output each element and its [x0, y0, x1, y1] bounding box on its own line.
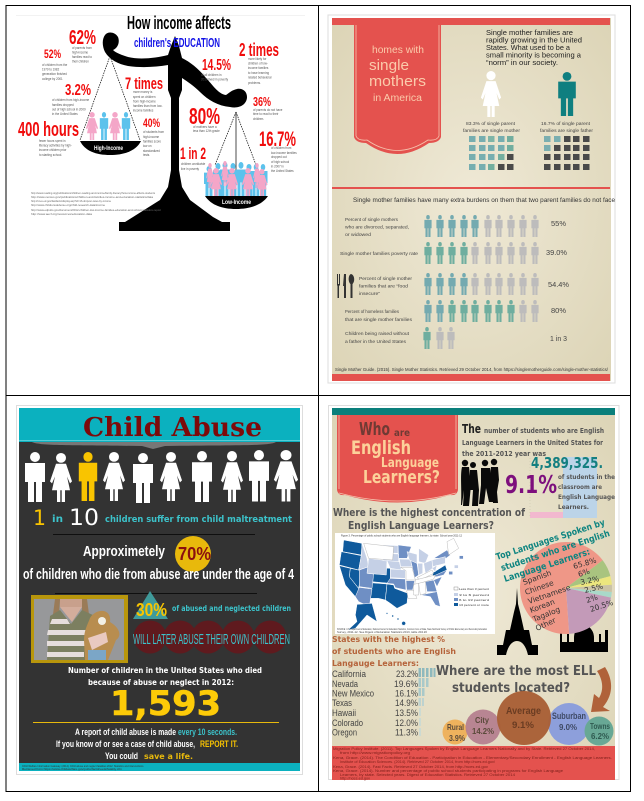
small statistic notes: the United States: [271, 169, 294, 173]
row labels: Percent of homeless families: [345, 309, 399, 315]
right pan: low-income: [204, 112, 268, 209]
small statistic notes: live in poverty: [181, 167, 199, 171]
small statistic notes: problems.: [248, 81, 261, 85]
footer references: Kena, Grace. (2014). Fast Facts. Retrieved 27 October 2014, from http://nces.ed.gov: [333, 765, 488, 769]
footer references: from http://www.migrationpolicy.org: [340, 751, 410, 755]
choropleth map of the United States: Less than 3 percent: [459, 587, 489, 591]
small statistic notes: low-income families: [271, 151, 297, 155]
small statistic notes: 1979 to 1982: [42, 67, 59, 72]
intro text: “norm” in our society.: [486, 58, 558, 67]
statistic: 1 in 10: 1: [33, 506, 46, 530]
heading: locations: Where are the most ELL: [436, 663, 596, 679]
captions: families are single mother: [463, 128, 521, 133]
row labels: Percent of single mother: [359, 276, 412, 282]
statistic: 1 in 10: children suffer from child maltreatment: [105, 515, 293, 525]
intro text: rapidly growing in the United: [486, 36, 582, 44]
ribbon heading: [337, 415, 458, 502]
captions: [463, 121, 594, 133]
small statistic notes: of high school: [271, 160, 289, 164]
bubble chart: locations: Suburban: [552, 711, 586, 722]
source list: http://www.aecf.org/resources/education-data: [31, 213, 93, 216]
small statistic notes: out of high school in 2009: [52, 107, 86, 112]
small statistic notes: high-income: [143, 135, 159, 139]
chart bars behind statistic: [530, 457, 597, 518]
row labels: a father in the United States: [345, 339, 407, 345]
row values: [546, 221, 569, 343]
pie labels: Vietnamese: [527, 583, 572, 606]
row labels: that are single mother families: [345, 317, 413, 323]
pie labels: 3.2%: [580, 574, 600, 587]
bubble chart: locations: [442, 691, 614, 746]
intro text: the 2011-2012 year was: [462, 450, 546, 458]
row labels: who are divorced, separated,: [345, 224, 409, 230]
state list: Oregon: [332, 728, 357, 738]
intro text: Single mother families are: [486, 28, 573, 37]
call to action: REPORT IT.: [200, 739, 238, 749]
call to action: [56, 727, 238, 761]
call to action: If you know of or see a case of child abuse,: [56, 739, 195, 749]
state list: Nevada: [332, 679, 358, 689]
small statistic notes: more money is: [133, 90, 153, 94]
state list: Hawaii: [332, 708, 356, 718]
row labels: or widowed: [345, 232, 371, 238]
icon: Eiffel Tower: [497, 588, 538, 655]
bubble chart: locations: 9.1%: [512, 720, 535, 731]
bubble chart: locations: 14.2%: [472, 726, 494, 736]
footer references: Learners, by state. Selected years. Digest of Education Statistics. Retrieved 27 October 2014: [340, 773, 515, 777]
small statistic notes: in 2007 in: [271, 164, 284, 169]
heading: top languages: students who are English: [500, 529, 611, 574]
call to action: save a life.: [144, 752, 193, 761]
ribbon heading: Learners?: [363, 467, 440, 488]
state list: 14.9%: [395, 698, 418, 708]
pie labels: Korean: [528, 597, 556, 615]
pie labels: Chinese: [524, 578, 555, 597]
mini pictograms: [418, 668, 436, 736]
source list: http://www.census.gov/publications/children-and-families-income-and-education-statistics/data: [31, 196, 154, 199]
small statistic notes: spent on children: [133, 95, 156, 99]
statistic: 70%: Approximetely: [83, 543, 166, 560]
choropleth map of the United States: 6 to 13 percent: [459, 598, 489, 602]
small statistic notes: families dropped: [52, 103, 74, 107]
row values: 39.0%: [546, 250, 567, 257]
bubble chart: locations: 3.9%: [449, 733, 465, 743]
small statistic notes: related behavioral: [248, 75, 272, 80]
panel: single mothers: [328, 15, 615, 383]
statistic: 1 in 10: in: [52, 514, 63, 525]
square grid: mothers: [469, 136, 514, 170]
right pan: low-income: Low-Income: [222, 199, 251, 206]
call to action: every 10 seconds.: [178, 727, 237, 737]
ribbon heading: in America: [373, 93, 422, 104]
intro text: small minority is becoming a: [486, 50, 582, 60]
pie labels: 65.8%: [572, 556, 597, 571]
red statistics: 52%: [44, 47, 61, 61]
ribbon heading: are: [394, 428, 410, 439]
small statistic notes: income families: [133, 108, 154, 113]
statistic: 30%: 30%: [136, 600, 167, 620]
red statistics: 7 times: [125, 74, 163, 93]
statistic: 70%: [23, 536, 294, 583]
pie labels: 6%: [577, 567, 591, 579]
source list: http://www.reading.org/publications/children-reading-and-income/family-literacy/how-income-affects-students: [31, 192, 156, 195]
icon: mother: [481, 71, 501, 117]
small statistic notes: of children from: [271, 146, 291, 150]
source list: http://www.childrensdefense.org/child-research-data/income: [31, 204, 106, 207]
small statistic notes: dropped out: [271, 155, 287, 159]
state list: Texas: [332, 698, 352, 708]
panel: English language learners: [328, 406, 619, 780]
pie labels: 2%: [585, 593, 599, 605]
title banner: Child Abuse: [83, 413, 262, 443]
row values: 80%: [551, 308, 566, 315]
small statistic notes: income families: [248, 66, 269, 70]
small statistic notes: families than from low-: [133, 104, 163, 108]
small statistic notes: low on: [143, 144, 152, 148]
red statistics: 62%: [69, 27, 96, 49]
state list: California: [332, 669, 366, 679]
captions: 83.3% of single parent: [466, 121, 516, 126]
small statistic notes: children.: [253, 117, 264, 121]
red statistics: 3.2%: [65, 82, 91, 99]
footer references: http://nces.ed.gov: [340, 776, 370, 780]
source list: http://www.edpubs.gov/document/2012-children-low-income-families-education-and-school-statistics-report: [31, 209, 161, 212]
statistic: 30%: of abused and neglected children: [172, 604, 291, 613]
small statistic notes: of children from high-income: [52, 98, 89, 102]
statistic: 9.1%: [505, 470, 616, 511]
bubble chart: locations: 6.2%: [591, 731, 609, 741]
source list: [31, 192, 161, 216]
small statistic notes: high-income: [72, 50, 88, 55]
small statistic notes: of children from the: [42, 63, 67, 67]
state list: [332, 635, 456, 738]
state list: States with the highest %: [332, 635, 445, 644]
left pan: high-income: [80, 56, 141, 155]
statistic: 9.1%: English Language: [558, 493, 616, 501]
heading: locations: students located?: [452, 680, 570, 696]
pie labels: Spanish: [522, 568, 553, 587]
source list: http://nces.ed.gov/fastfacts/display.asp?id=16-dropout-rates-by-income: [31, 200, 112, 203]
small statistic notes: income children prior: [39, 148, 67, 152]
row labels: [340, 217, 418, 345]
footer references: Institute of Education Sciences. (2014). Retrieved 27 October 2014, from http://nces.ed.gov/: [340, 760, 495, 764]
pie chart: top languages: [520, 542, 614, 634]
small statistic notes: families read to: [72, 55, 92, 59]
red statistics: [18, 27, 296, 163]
icon: father: [558, 72, 576, 116]
state list: 23.2%: [396, 669, 418, 679]
statistic: 9.1%: 9.1%: [505, 470, 557, 499]
small statistic notes: from high-income: [133, 99, 156, 104]
subtitle: children's EDUCATION: [134, 35, 220, 50]
title: How income affects: [127, 13, 231, 33]
small statistic notes: of students from: [143, 130, 164, 134]
choropleth map of the United States: Survey, 2011-12. See Digest of Education Statistics 2013, table 204.20: [337, 631, 428, 634]
left pan: high-income: High-Income: [94, 145, 123, 152]
bubble chart: locations: City: [475, 715, 489, 725]
pie labels: 20.5%: [589, 598, 614, 614]
statistic: 1,593: Number of children in the United States who died: [68, 666, 262, 675]
intro text: States. What used to be a: [486, 43, 571, 52]
statistic: 9.1%: of students in the: [558, 473, 616, 481]
intro text: Language Learners in the United States for: [462, 439, 603, 447]
footer references: Migration Policy Institute. (2011). Top Languages Spoken by English Language Learners Nationally and by State. Retrieved 27 October 2014,: [333, 747, 595, 751]
icon: student silhouettes: [461, 459, 499, 506]
statistic: 1 in 10: 10: [69, 506, 99, 531]
footer citation: [19, 763, 300, 771]
small statistic notes: in the United States: [52, 112, 78, 116]
red statistics: 16.7%: [259, 128, 296, 151]
pie labels: Tagalog: [530, 605, 562, 624]
call to action: A report of child abuse is made: [75, 727, 176, 737]
ribbon heading: [354, 25, 441, 154]
small statistic notes: children worldwide: [181, 162, 205, 166]
intro text: [462, 422, 604, 458]
small statistic notes: [39, 46, 297, 173]
small statistic notes: less than 12th grade: [193, 129, 220, 133]
heading: map: Where is the highest concentration of: [333, 506, 525, 519]
footer citation: Child Welfare Information Gateway. (2014). Child abuse and neglect fatalities 2012: Statistics and interventions.: [22, 765, 144, 768]
heading: locations: [436, 663, 596, 696]
heading: top languages: Language Learners:: [503, 548, 592, 585]
small statistic notes: fewer hours spent in: [39, 139, 66, 143]
footer citation: Retrieved from https://www.childwelfare.gov/pubs/factsheets/fatality.cfm: [22, 768, 122, 771]
small statistic notes: their children: [72, 59, 89, 64]
heading: top languages: [495, 518, 611, 585]
bubble chart: locations: Rural: [447, 722, 464, 732]
icon: utensils: [337, 274, 354, 298]
row values: 55%: [551, 221, 566, 228]
statistic: 1,593: [68, 666, 262, 724]
pictogram rows: [423, 215, 539, 349]
row labels: Percent of single mothers: [345, 217, 399, 223]
row labels: Single mother families poverty rate: [340, 251, 418, 257]
choropleth map of the United States: SOURCE: U.S. Department of Education, National Center for Education Statistics, Common Core of Data, State Nonfiscal Survey of Public Elementary and Secondary Education: [337, 628, 487, 631]
small statistic notes: literacy activities by high-: [39, 143, 72, 148]
small statistic notes: families score: [143, 139, 161, 144]
ribbon heading: Who: [359, 419, 390, 440]
statistic: 1 in 10: [33, 506, 293, 531]
bubble chart: locations: Towns: [590, 721, 610, 731]
photo: girl with teddy bear: [31, 595, 128, 663]
state list: Colorado: [332, 718, 363, 728]
heading: top languages: Top Languages Spoken by: [495, 518, 606, 563]
statistic: 30%: [133, 591, 291, 654]
small statistic notes: of parents from: [72, 46, 92, 50]
intro text: The: [462, 422, 481, 436]
square grid: fathers: [544, 136, 590, 170]
panel: income and education: [16, 13, 305, 231]
statistic: 1,593: because of abuse or neglect in 2012:: [88, 678, 234, 687]
red statistics: 14.5%: [202, 57, 231, 74]
state list: 19.6%: [394, 679, 418, 689]
small statistic notes: to starting school.: [39, 153, 62, 157]
ribbon heading: Language: [381, 456, 439, 471]
heading: map: English Language Learners?: [348, 519, 494, 532]
state list: 13.5%: [395, 708, 418, 718]
red statistics: 36%: [253, 94, 271, 109]
pie labels: Other: [534, 615, 558, 633]
row labels: families that are “food: [359, 284, 408, 290]
footer references: Kena, Grace. (2014). Number and percentage of public school students participating in programs for English Language: [333, 769, 563, 773]
row values: 1 in 3: [550, 336, 567, 343]
red statistics: 40%: [143, 116, 160, 130]
choropleth map of the United States: 13 percent or more: [459, 603, 490, 607]
choropleth map of the United States: [335, 533, 495, 634]
statistic: 70%: 70%: [178, 544, 211, 564]
state list: of students who are English: [332, 647, 456, 656]
row values: 54.4%: [548, 282, 569, 289]
captions: families are single father: [540, 128, 594, 133]
ribbon heading: English: [351, 437, 411, 459]
red statistics: 2 times: [239, 40, 279, 60]
ribbon heading: homes with: [372, 44, 424, 56]
state list: Langauge Learners:: [332, 659, 419, 668]
call to action: You could: [105, 751, 138, 761]
small statistic notes: time to read to their: [253, 112, 279, 116]
arrow: [591, 667, 611, 712]
footer references: [332, 746, 615, 780]
pie labels: 2.5%: [583, 582, 604, 595]
state list: New Mexico: [332, 688, 374, 698]
heading: map: [333, 506, 525, 532]
red statistics: 80%: [189, 103, 220, 129]
intro text: number of students who are English: [484, 427, 604, 435]
red statistics: 1 in 2: [180, 144, 206, 163]
ribbon heading: mothers: [369, 73, 426, 90]
captions: 16.7% of single parent: [541, 121, 591, 126]
small statistic notes: of parents do not have: [253, 108, 282, 112]
ribbon heading: single: [369, 57, 409, 74]
row labels: insecure”: [359, 291, 380, 297]
row labels: Children being raised without: [345, 331, 410, 337]
state list: 11.3%: [395, 728, 418, 738]
small statistic notes: tests.: [143, 153, 150, 157]
state list: 16.1%: [395, 688, 418, 698]
intro text: [486, 28, 582, 67]
choropleth map of the United States: 3 to 6 percent: [459, 593, 489, 597]
statistic: total learners: 4,389,325.: [531, 454, 603, 472]
small statistic notes: 2010 lived in poverty: [201, 77, 228, 82]
small statistic notes: to have learning: [248, 71, 269, 75]
icon: Taj Mahal: [560, 622, 608, 652]
small statistic notes: generation finished: [42, 72, 67, 76]
illustration: balance scale: [103, 33, 247, 231]
small statistic notes: of mothers have a: [193, 125, 217, 129]
small statistic notes: more likely for: [248, 57, 267, 61]
small statistic notes: of all children in: [201, 73, 222, 77]
statistic: 9.1%: classroom are: [558, 483, 602, 491]
red statistics: 400 hours: [18, 119, 79, 141]
section sentence: Single mother families have many extra burdens on them that two parent families do not face: [353, 197, 615, 204]
state list: 12.0%: [395, 718, 418, 728]
pie labels: [522, 556, 614, 633]
footer references: Kena, Grace. (2014). The Condition of Education - Participation in Education - Elementary/Secondary Enrollment - English Language Learners.: [333, 756, 612, 760]
bubble chart: locations: Average: [506, 705, 541, 717]
statistic: 9.1%: Learners.: [558, 503, 589, 511]
panel: child abuse: [16, 406, 302, 774]
title banner: [19, 408, 300, 449]
pictogram: 1 in 10: [25, 450, 298, 503]
choropleth map of the United States: Figure 3. Percentage of public school students who are English language learners, by state: School year 2011-12: [341, 534, 463, 538]
statistic: 1,593: 1,593: [110, 684, 221, 724]
statistic: 70%: of children who die from abuse are under the age of 4: [23, 566, 294, 583]
small statistic notes: college by 2001: [42, 77, 63, 81]
statistic: 30%: WILL LATER ABUSE THEIR OWN CHILDREN: [133, 631, 290, 648]
small statistic notes: children of low-: [248, 61, 268, 66]
bubble chart: locations: 9.0%: [559, 722, 577, 732]
citation: Single Mother Guide. (2015). Single Mother Statistics. Retrieved 29 October 2014, from https://singlemotherguide.com/single-mother-statistics/: [335, 367, 609, 372]
small statistic notes: standardized: [143, 149, 160, 153]
